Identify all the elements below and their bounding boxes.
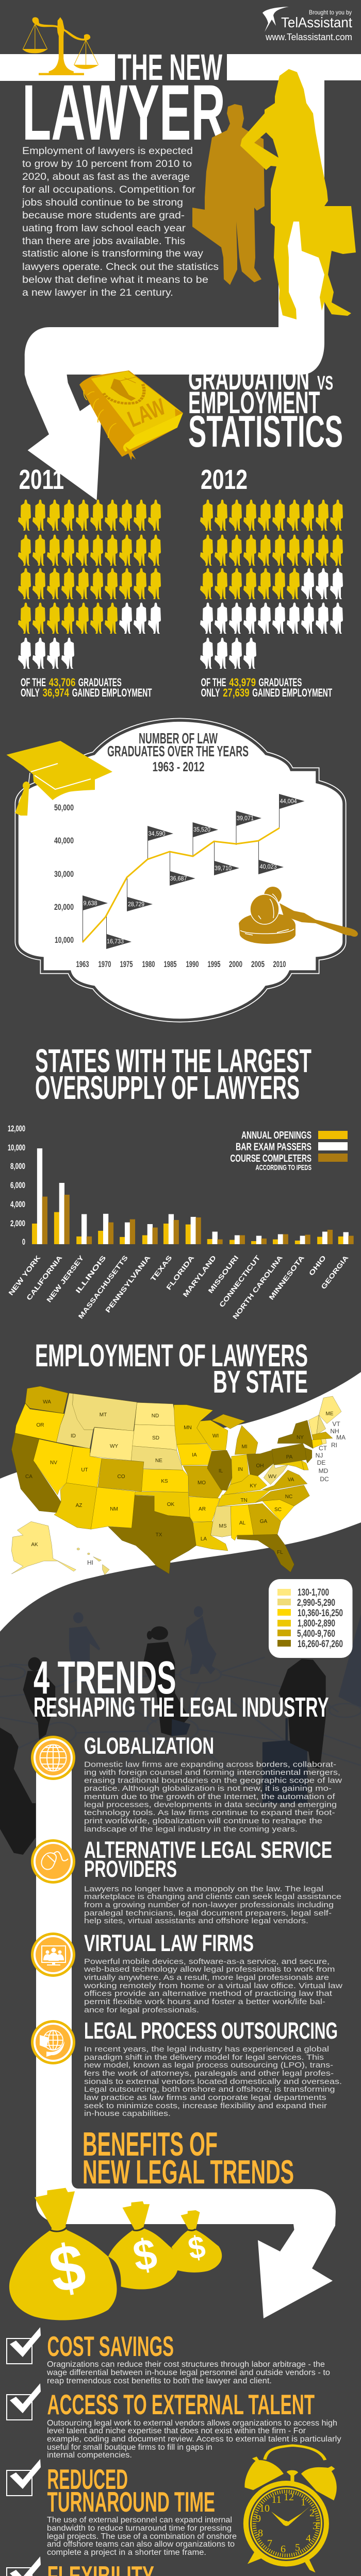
flag values: 44,004 [280,798,297,805]
map: state abbreviations: NV [50,1460,57,1466]
y axis labels: 20,000 [54,902,74,912]
bar chart: state labels: CALIFORNIA [25,1253,64,1302]
heading: benefits of new legal trends [83,2125,294,2191]
trend: alternative legal service providers: marketplace is changing and clients can seek legal assistance [84,1893,341,1901]
map: state abbreviations: AL [239,1520,246,1526]
map: state abbreviations: ME [326,1411,334,1417]
flag values: 39,710 [215,865,232,872]
map: state abbreviations: SD [152,1435,159,1441]
map: state abbreviations: OH [256,1463,264,1469]
illustration: woman silhouette [240,69,356,319]
chart title: NUMBER OF LAW [139,731,218,747]
bar chart legend: ANNUAL OPENINGS [241,1130,311,1141]
bar chart: y axis: 2,000 [10,1218,25,1228]
map: state abbreviations: WA [43,1399,51,1405]
trend: alternative legal service providers: PROVIDERS [84,1856,177,1882]
map: state abbreviations: ND [152,1413,159,1419]
y axis labels [54,803,74,945]
trend: alternative legal service providers: paralegal technicians, legal document preparers, legal self- [84,1909,332,1918]
map: state abbreviations: NC [285,1494,292,1500]
background: silhouettes of people on a network [0,1606,361,1855]
intro paragraph: for all occupations. Competition for [22,184,196,195]
trend: globalization: mentum due to the growth of the Internet, the automation of [84,1793,336,1801]
trend: legal process outsourcing: Legal outsourcing, both onshore and offshore, is transforming [84,2086,335,2094]
bar chart: state labels [7,1253,350,1320]
intro paragraph: 2020, about as fast as the average [22,172,190,182]
icon: alarm clock: 10 [259,2503,270,2514]
intro paragraph: lawyers operate. Check out the statistics [22,262,219,273]
benefit: reduced turnaround time: TURNAROUND TIME [47,2486,215,2518]
bar chart: y axis: 10,000 [8,1143,25,1153]
caption: 2012 figures: GRADUATES [258,676,302,689]
map: outside labels: DE [317,1459,325,1466]
trend: globalization: print worldwide, globalization will continue to reshape the [84,1817,322,1825]
caption: 2011 figures: GRADUATES [78,676,122,689]
heading: graduation vs employment statistics [188,362,343,456]
map: outside labels: VT [332,1420,340,1428]
map: state abbreviations: FL [277,1550,283,1555]
icon: alarm clock [243,2446,337,2572]
title: the new lawyer: THE NEW [118,47,222,88]
benefit: cost savings: Oragnizations can reduce their cost structures through labor arbitrage - the [47,2360,325,2369]
map: state abbreviations: VA [288,1477,294,1483]
map legend: 10,360-16,250 [298,1608,343,1619]
title: the new lawyer [22,47,225,157]
line chart with flags [54,794,305,969]
x axis labels: 1980 [142,959,155,969]
caption: 2011 figures: ONLY [21,686,40,699]
caption: 2011 figures: 43,706 [49,676,75,689]
bar chart: y axis: 0 [22,1237,25,1247]
map: outside labels: MA [336,1434,346,1441]
bar chart: state labels: NORTH CAROLINA [231,1253,284,1320]
caption: 2012 figures: OF THE [201,676,226,689]
map: state abbreviations: MN [184,1425,192,1431]
bar chart legend: BAR EXAM PASSERS [236,1142,311,1153]
caption: 2012 figures: 27,639 [223,686,250,699]
benefit: reduced turnaround time: and offshore teams can also allow organizations to [47,2540,235,2549]
icon: alarm clock: 8 [258,2528,263,2539]
bar chart legend: COURSE COMPLETERS [230,1153,311,1164]
map: state abbreviations: IA [192,1452,197,1458]
x axis labels: 1975 [120,959,133,969]
icon: scales of justice [22,17,99,75]
year label: 2012: 2012 [201,464,248,495]
trend: virtual law firms [84,1930,343,2014]
bar chart: y axis: 4,000 [10,1199,25,1209]
bar chart: state labels: ILLINOIS [74,1253,108,1295]
icon: money bags: $ [44,2230,91,2307]
map: state abbreviations: OR [36,1422,44,1428]
chart title: 1963 - 2012 [153,759,204,774]
icon: money bags: $ [186,2229,208,2266]
map: outside labels: RI [331,1442,337,1449]
map: state abbreviations: CA [25,1474,32,1480]
flag values: 40,023 [260,863,277,870]
map: state abbreviations [25,1399,334,1555]
trend: virtual law firms: permit flexible work hours and foster a better work/life bal- [84,1998,325,2006]
icon: alarm clock: 4 [306,2533,311,2544]
trend: alternative legal service providers: help sites, virtual assistants and offshore legal vendors. [84,1917,308,1925]
trend: legal process outsourcing: fers the work of attorneys, paralegals and other legal profes- [84,2070,334,2078]
map: outside labels: NJ [316,1452,323,1459]
intro paragraph [22,146,219,298]
map legend: 5,400-9,760 [297,1629,335,1639]
panel: law graduates chart frame [17,720,344,1020]
map: state abbreviations: CO [118,1474,125,1480]
bar chart: y axis: 12,000 [8,1124,25,1133]
map: state abbreviations: KS [161,1479,168,1484]
flag values: 28,729 [128,901,144,908]
map: state abbreviations: KY [250,1483,257,1489]
benefit: access to external talent: Outsourcing legal work to external vendors allows organizations to access high [47,2419,337,2428]
intro paragraph: jobs should continue to be strong [22,197,183,208]
map: state abbreviations: AR [199,1506,206,1512]
benefit: access to external talent: example, coding and document review. Access to external talent is particularly [47,2435,341,2444]
map: state abbreviations: AZ [76,1503,82,1509]
bar chart: state labels: MASSACHUSETTS [77,1253,129,1320]
caption: 2011 figures: 36,974 [43,686,70,699]
heading: benefits of new legal trends: BENEFITS OF [83,2125,218,2163]
bar chart: state labels: CONNECTICUT [218,1254,261,1309]
trend: virtual law firms: ance for legal professionals. [84,2006,199,2014]
bar chart legend: ACCORDING TO IPEDS [256,1163,311,1172]
icon: money bags: $ [129,2230,160,2281]
icon: money bags [9,2188,222,2320]
icon: alarm clock: 9 [256,2513,261,2524]
trend: legal process outsourcing: In recent years, the legal industry has experienced a global [84,2045,329,2054]
icon: alarm clock: 11 [271,2494,282,2505]
icon: graduation cap [6,741,112,816]
heading: employment of lawyers by state [35,1338,308,1399]
icon: alarm clock: 1 [301,2497,306,2508]
map: state abbreviations: WY [110,1444,118,1449]
benefit: reduced turnaround time: complete a project in a shorter time frame. [47,2548,206,2557]
trend: globalization: GLOBALIZATION [84,1733,214,1759]
chart title: GRADUATES OVER THE YEARS [107,743,249,760]
intro paragraph: a new lawyer in the 21 century. [22,287,173,298]
intro paragraph: than there are jobs available. This [22,236,185,247]
trend: virtual law firms: Powerful mobile devices, software-as-a service, and secure, [84,1958,330,1966]
trend: legal process outsourcing [84,2018,342,2118]
benefit: access to external talent: level talent and niche expertise that does not exist within the firm - For [47,2427,306,2435]
map: state abbreviations: IL [219,1468,223,1474]
map: outside labels [87,1420,346,1566]
heading: employment of lawyers by state: BY STATE [213,1364,308,1399]
icon: alarm clock: 7 [267,2538,272,2549]
map: outside labels: NH [330,1428,339,1435]
benefit: reduced turnaround time: legal projects. The use of a combination of onshore [47,2532,237,2541]
bar chart: state labels: GEORGIA [319,1253,350,1291]
year label: 2011: 2011 [19,464,64,495]
benefit: reduced turnaround time [7,2459,237,2557]
trend: alternative legal service providers [84,1837,341,1925]
benefit: reduced turnaround time: REDUCED [47,2463,128,2495]
flag values: 35,520 [193,826,210,833]
y axis labels: 40,000 [54,836,74,845]
map: outside labels: HI [87,1559,93,1566]
logo: TelAssistant: TelAssistant [281,14,352,30]
trend: globalization: erasing traditional boundaries on the geographic scope of law [84,1777,342,1785]
x axis labels: 2005 [251,959,265,969]
map: state abbreviations: WV [268,1474,276,1480]
bar chart: state labels: FLORIDA [165,1253,196,1292]
bar chart: state labels: OHIO [307,1254,327,1277]
intro paragraph: to grow by 10 percent from 2010 to [22,159,192,170]
trend: legal process outsourcing: seek to minimize costs, increase flexibility and expand their [84,2102,327,2110]
icon: virtual meeting screen [31,1933,75,1977]
flag values: 34,590 [149,830,166,837]
caption: 2011 figures: OF THE [21,676,46,689]
trend: legal process outsourcing: sionals to external vendors located domestically and overseas. [84,2078,342,2086]
intro paragraph: below that define what it means to be [22,275,208,285]
white swoosh behind map [0,1372,361,1632]
map: state abbreviations: AK [31,1542,38,1548]
bar chart: y axis [8,1124,25,1247]
icon: alarm clock: 5 [295,2542,300,2553]
trend: globalization: landscape of the legal industry in the coming years. [84,1825,298,1834]
x axis labels: 1963 [76,959,89,969]
logo: TelAssistant: www.Telassistant.com [265,32,352,42]
heading: 4 trends: 4 TRENDS [34,1652,176,1704]
trend: legal process outsourcing: paradigm shift in the delivery model for legal services. This [84,2054,324,2062]
map: outside labels: CT [319,1445,327,1452]
map: state abbreviations: MS [219,1523,227,1529]
bar chart: oversupply by state [32,1148,354,1244]
benefit: flexibility [7,2556,337,2576]
trend: virtual law firms: offices provide an alternative method of practicing law that [84,1990,332,1998]
map: state abbreviations: MI [241,1444,248,1450]
bar chart: state labels: MISSOURI [206,1254,240,1295]
logo: TelAssistant [262,7,352,42]
icon: alarm clock: 2 [309,2507,315,2519]
benefit: access to external talent [7,2383,341,2460]
map: state abbreviations: IN [238,1467,243,1472]
map: state abbreviations: WI [212,1433,219,1439]
trend: virtual law firms: VIRTUAL LAW FIRMS [84,1930,254,1956]
map: state abbreviations: GA [260,1519,268,1524]
icon: alarm clock: 6 [281,2544,286,2555]
y axis labels: 10,000 [55,935,74,945]
map legend: 2,990-5,290 [297,1598,335,1608]
map legend: 130-1,700 [298,1587,329,1598]
map: outside labels: DC [320,1476,329,1483]
bar chart: state labels: MINNESOTA [267,1253,306,1301]
map: state abbreviations: PA [286,1454,293,1460]
flag values [84,798,297,945]
trend: globalization: technology tools. As law firms continue to expand their foot- [84,1809,335,1817]
flags [83,794,305,949]
intro paragraph: Employment of lawyers is expected [22,146,193,157]
pictogram: 2011 graduates [18,500,161,669]
trend: alternative legal service providers: Lawyers no longer have a monopoly on the law. The legal [84,1885,323,1893]
intro paragraph: statistic alone is transforming the way [22,248,204,259]
x axis labels [76,959,286,969]
intro paragraph: because more students are grad- [22,210,185,221]
trend: globalization: practice. Although globalization is not new, it is gaining mo- [84,1785,332,1793]
trend: virtual law firms: web-based technology allow legal professionals to work from [84,1965,335,1974]
white ribbon arrow: top [0,54,361,500]
icon: globalization [31,1736,75,1780]
trend: alternative legal service providers: from a growing number of non-lawyer professionals including [84,1901,334,1909]
flag values: 9,638 [84,900,97,907]
map: state abbreviations: LA [201,1536,207,1542]
map: state abbreviations: TX [156,1532,162,1538]
bar chart: y axis: 6,000 [10,1180,25,1190]
caption: 2011 figures: GAINED EMPLOYMENT [72,686,152,699]
icon: mouse [31,1839,75,1884]
benefit: reduced turnaround time: The use of external personnel can expand internal [47,2516,232,2524]
caption: 2011 figures [21,676,152,699]
logo: TelAssistant: Brought to you by [309,9,352,16]
trend: legal process outsourcing: in-house capabilities. [84,2110,171,2118]
x axis labels: 2010 [273,959,286,969]
icon: outsourcing globe [31,2020,75,2064]
trend: globalization [84,1733,342,1834]
intro paragraph: uating from law school each year [22,223,186,234]
trend: legal process outsourcing: law practice as law firms and corporate legal departments [84,2094,326,2102]
caption: 2012 figures: ONLY [201,686,220,699]
x axis labels: 1990 [186,959,199,969]
y axis labels: 30,000 [54,869,74,879]
map: state abbreviations: SC [274,1507,282,1513]
map: state abbreviations: NE [155,1458,162,1464]
map legend [269,1579,353,1658]
benefit: access to external talent: internal competencies. [47,2451,132,2460]
caption: 2012 figures: 43,979 [229,676,256,689]
white ribbon arrow: trends [36,1762,336,2318]
bar chart: state labels: NEW YORK [7,1253,42,1297]
illustration: man silhouette [192,104,265,285]
map: state abbreviations: ID [71,1433,76,1439]
x axis labels: 1985 [164,959,176,969]
map: state abbreviations: NM [110,1506,118,1512]
trend: globalization: Domestic law firms are expanding across borders, collaborat- [84,1760,336,1769]
graduates trend line [83,828,280,942]
map: state abbreviations: TN [240,1498,248,1503]
bar chart: state labels: PENNSYLVANIA [104,1253,152,1314]
trend: globalization: ing with foreign counsel and forming intercontinental mergers, [84,1769,340,1777]
trend: legal process outsourcing: new model, known as legal process outsourcing (LPO), trans- [84,2061,333,2070]
flag values: 16,733 [107,938,124,945]
map legend: 1,800-2,890 [298,1618,335,1629]
x axis labels: 1970 [98,959,111,969]
flag values: 36,687 [170,875,187,882]
heading: states with the largest oversupply [35,1042,311,1106]
map: state abbreviations: OK [167,1502,175,1507]
x axis labels: 2000 [229,959,242,969]
y axis labels: 50,000 [54,803,74,812]
map legend: 16,260-67,260 [298,1639,343,1650]
x axis labels: 1995 [207,959,221,969]
bar chart: state labels: MARYLAND [182,1254,218,1298]
bar chart: y axis: 8,000 [10,1161,25,1171]
heading: graduation vs employment statistics: VS [317,372,333,394]
bar chart: state labels: NEW JERSEY [45,1253,86,1304]
trend: globalization: legal processes, developments in data security and emerging [84,1801,337,1809]
map: state abbreviations: NY [297,1435,304,1440]
benefit: cost savings [7,2327,330,2385]
benefit: access to external talent: useful for small boutique firms to fill in gaps in [47,2443,212,2452]
pictogram: 2012 graduates [200,500,343,669]
bar chart legend [230,1130,348,1172]
map: state abbreviations: MO [198,1480,206,1486]
icon: gavel [239,887,358,944]
title: the new lawyer: LAWYER [22,69,225,157]
bar chart: state labels: TEXAS [149,1253,174,1283]
caption: 2012 figures [201,676,333,699]
map: state abbreviations: MT [100,1412,107,1418]
icon: law book [79,370,183,460]
map: employment of lawyers by US state [11,1386,341,1575]
map: state abbreviations: UT [81,1467,88,1473]
flag values: 39,071 [237,815,254,822]
benefit: cost savings: COST SAVINGS [47,2330,174,2362]
book label: law: LAW [124,393,169,432]
benefit: cost savings: reap tremendous cost benefits to both the lawyer and client. [47,2377,272,2385]
benefit: cost savings: wage differential between in-house legal personnel and outside vendors - to [46,2368,330,2377]
trend: virtual law firms: virtually anywhere. As a result, more legal professionals are [84,1974,329,1982]
icon: alarm clock: 12 [284,2492,294,2503]
benefit: reduced turnaround time: bandwidth to reduce turnaround time for pressing [47,2524,232,2533]
icon: alarm clock: 3 [313,2520,318,2532]
trend: virtual law firms: working remotely from home or a virtual law office. Virtual law [84,1982,343,1990]
heading: 4 trends [34,1652,329,1723]
chart title [107,731,249,774]
map: outside labels: MD [319,1467,329,1475]
